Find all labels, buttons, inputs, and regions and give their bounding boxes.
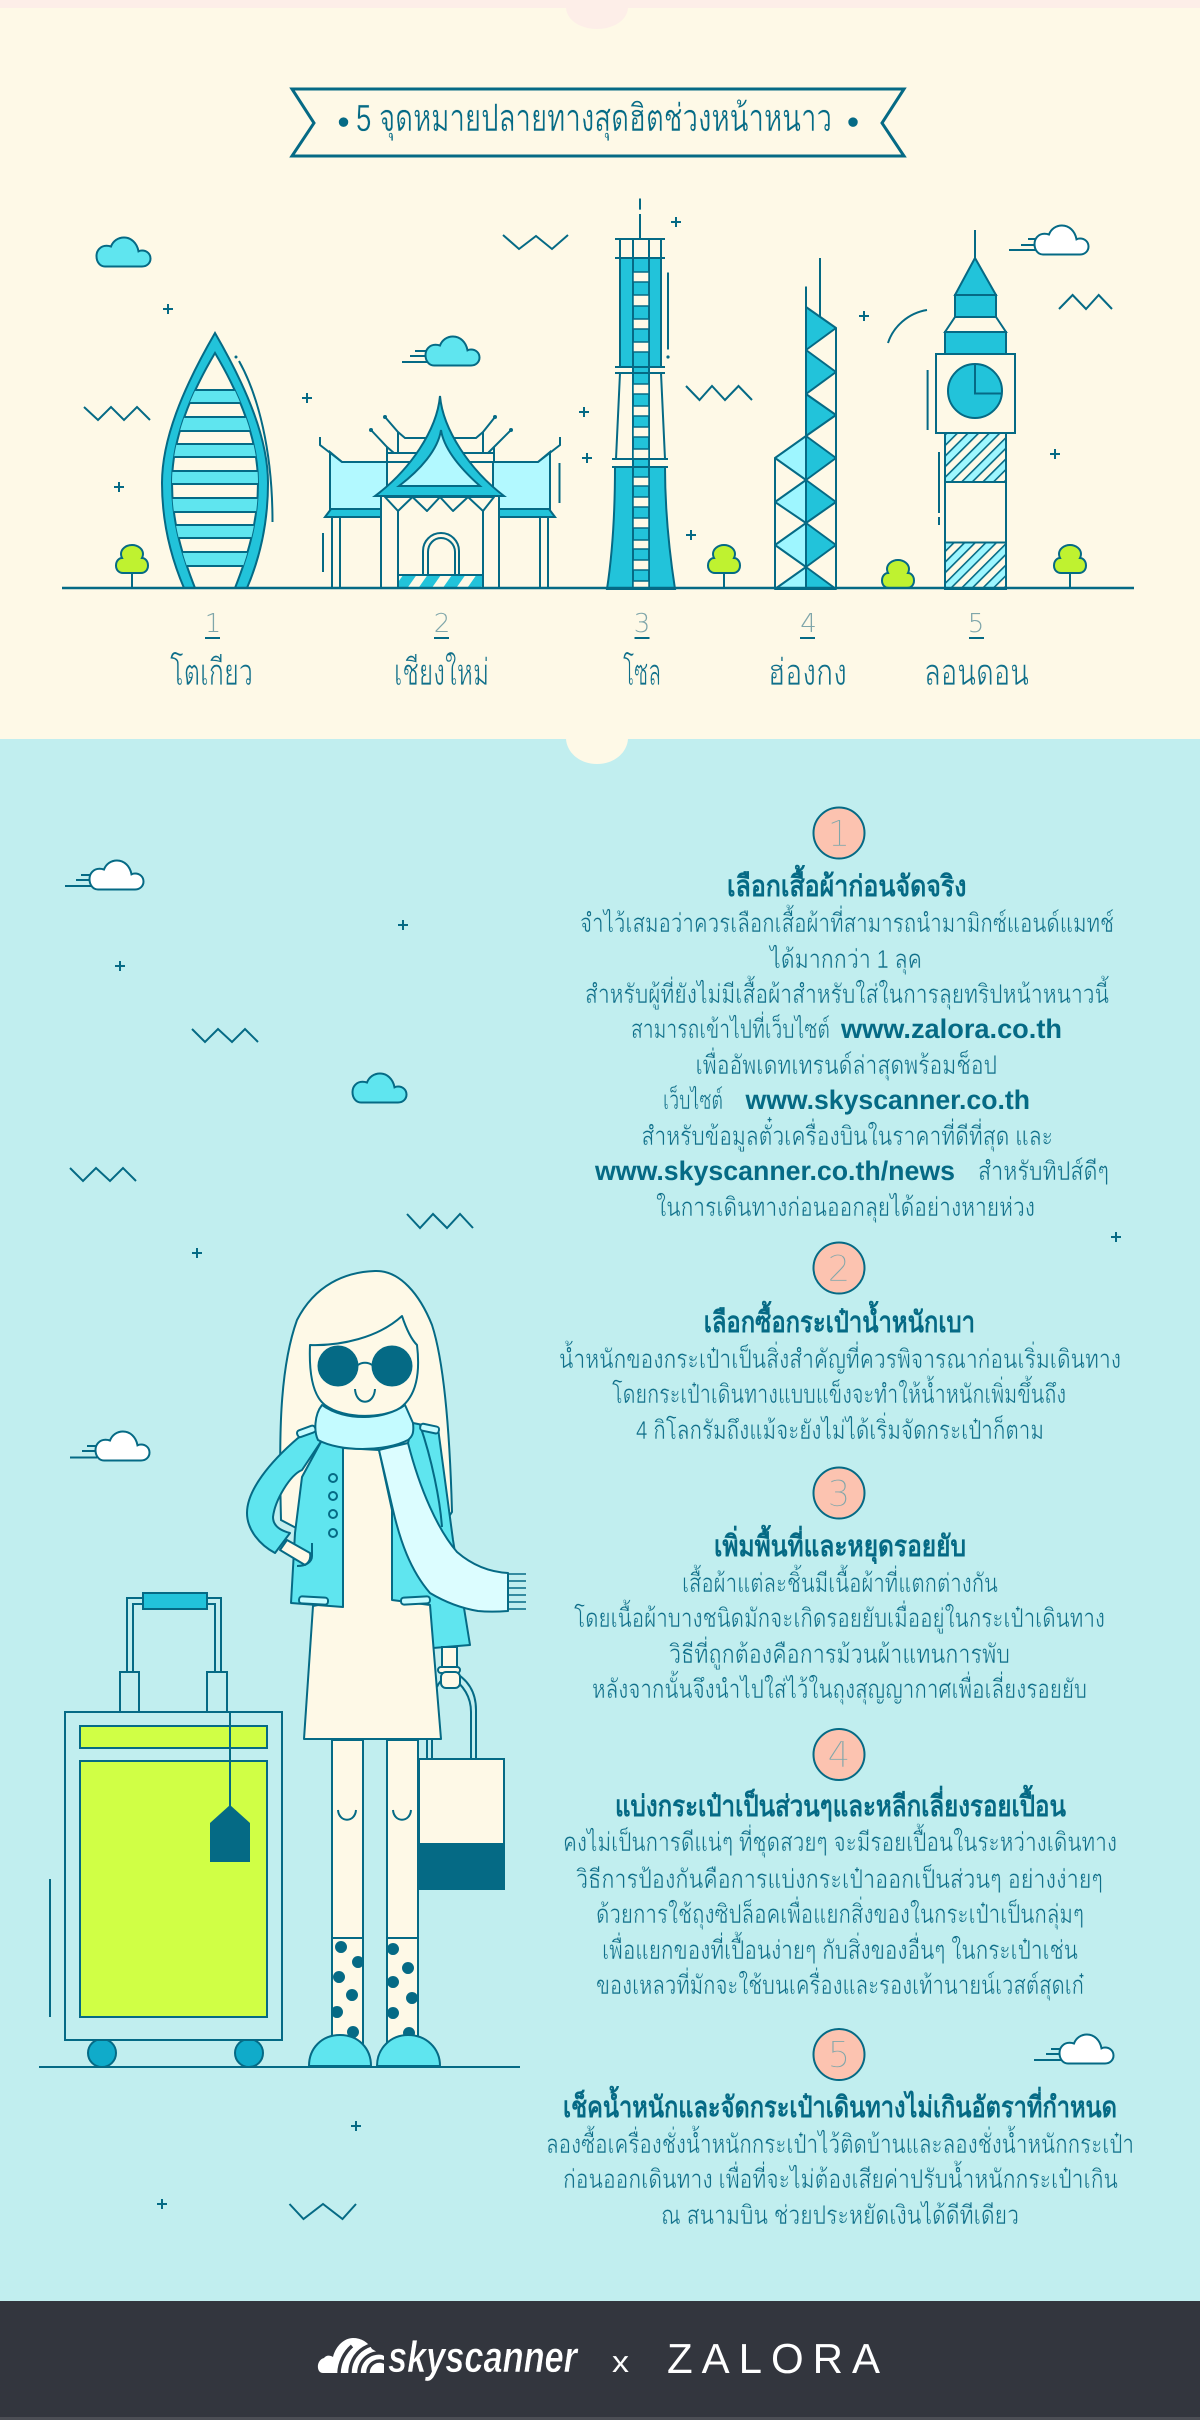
tip 4 number badge <box>814 1729 864 1780</box>
socks <box>332 1938 363 2043</box>
left sleeve <box>247 1430 322 1553</box>
city label 3: 3 <box>634 609 650 639</box>
cloud: cyan middle <box>352 1074 406 1102</box>
tip 4 body text: เพื่อแยกของที่เปื้อนง่ายๆ กับสิ่งของอื่นๆ ในกระเป๋าเช่น <box>602 1931 1078 1965</box>
tip 3 number badge: 3 <box>828 1474 850 1515</box>
legs <box>332 1740 363 1938</box>
tip 1 body text: www.skyscanner.co.th <box>745 1085 1030 1115</box>
tip 4 heading: แบ่งกระเป๋าเป็นส่วนๆและหลีกเลี่ยงรอยเปื้อน <box>615 1784 1066 1823</box>
title ribbon: • <box>847 103 859 140</box>
city label 5 <box>924 609 1029 693</box>
sunglasses <box>318 1346 358 1386</box>
shoes <box>309 2035 371 2066</box>
tip 1 body text <box>580 904 1114 1223</box>
footer bar <box>0 2301 1200 2420</box>
tip 1 body text: ในการเดินทางก่อนออกลุยได้อย่างหายห่วง <box>656 1192 1035 1223</box>
landmark: Chiang Mai temple <box>320 396 560 588</box>
tip 1 body text: ได้มากกว่า 1 ลุค <box>768 944 922 975</box>
tip 5 body text: ณ สนามบิน ช่วยประหยัดเงินได้ดีทีเดียว <box>661 2200 1019 2230</box>
tip 4 body text: วิธีการป้องกันคือการแบ่งกระเป๋าออกเป็นส่วนๆ อย่างง่ายๆ <box>576 1863 1103 1894</box>
tip 5 body text <box>546 2125 1134 2230</box>
tip 4 body text: ด้วยการใช้ถุงซิปล็อคเพื่อแยกสิ่งของในกระเป๋าเป็นกลุ่มๆ <box>596 1896 1084 1930</box>
smile <box>355 1389 375 1402</box>
tip 4 number badge: 4 <box>828 1735 850 1776</box>
city label 2: เชียงใหม่ <box>394 651 489 693</box>
tip 2 <box>559 1242 1121 1445</box>
bag handles <box>427 1671 476 1759</box>
tip 1 body text: สามารถเข้าไปที่เว็บไซต์ <box>631 1011 830 1044</box>
tip 3 body text: หลังจากนั้นจึงนำไปใส่ไว้ในถุงสุญญากาศเพื่อเลี่ยงรอยยับ <box>592 1670 1087 1705</box>
tip 2 body text: 4 กิโลกรัมถึงแม้จะยังไม่ได้เริ่มจัดกระเป๋าก็ตาม <box>636 1412 1044 1445</box>
right hand <box>442 1647 457 1670</box>
cloud: white lower left <box>70 1432 150 1460</box>
trees <box>116 545 1086 588</box>
city label 4 <box>768 609 847 693</box>
tip 1 heading: เลือกเสื้อผ้าก่อนจัดจริง <box>727 864 966 903</box>
footer cross sign: x <box>612 2346 629 2379</box>
right sleeve <box>391 1423 470 1648</box>
city label 1: 1 <box>205 609 221 639</box>
shopping bag <box>419 1759 504 1889</box>
tip 1 body text: เพื่ออัพเดทเทรนด์ล่าสุดพร้อมช็อป <box>696 1047 997 1081</box>
city label 3 <box>623 609 661 693</box>
left jacket panel <box>291 1440 343 1607</box>
city label 3: โซล <box>623 651 661 693</box>
tip 2 number badge <box>814 1242 864 1294</box>
tip 3 heading: เพิ่มพื้นที่และหยุดรอยยับ <box>714 1524 966 1565</box>
landmark: Tokyo tower <box>160 333 272 588</box>
city label 2 <box>394 609 489 693</box>
background: top cream panel <box>0 0 1200 739</box>
lower ground line <box>39 2066 520 2068</box>
cloud: white right <box>1034 2034 1114 2064</box>
scarf tail <box>379 1443 508 1612</box>
cloud: light cyan with speed lines <box>402 336 480 366</box>
city label 4: 4 <box>800 609 817 639</box>
cloud: white upper left <box>65 860 144 890</box>
city label 5: ลอนดอน <box>924 652 1029 693</box>
skyline sky decorations <box>84 217 1112 572</box>
city label 1 <box>170 609 253 693</box>
tip 1 <box>580 808 1114 1223</box>
city label 2: 2 <box>434 609 450 639</box>
hair <box>280 1271 452 1530</box>
epaulettes and pockets <box>296 1425 316 1438</box>
tip 2 body text: โดยกระเป๋าเดินทางแบบแข็งจะทำให้น้ำหนักเพิ่มขึ้นถึง <box>612 1375 1066 1409</box>
cloud: white with speed lines <box>1009 226 1088 254</box>
logo: Zalora wordmark: ZALORA <box>667 2335 880 2382</box>
tip 2 number badge: 2 <box>828 1249 850 1290</box>
tip 3 number badge <box>814 1468 864 1518</box>
tip 1 body text: สำหรับข้อมูลตั๋วเครื่องบินในราคาที่ดีที่สุด และ <box>642 1117 1053 1152</box>
city label 4: ฮ่องกง <box>768 652 847 693</box>
tip 3 body text: เสื้อผ้าแต่ละชิ้นมีเนื้อผ้าที่แตกต่างกัน <box>682 1564 998 1598</box>
tip 3 body text <box>574 1564 1105 1705</box>
skyline ground line <box>62 587 1134 589</box>
lower panel sky decorations <box>50 920 1121 2219</box>
dress <box>304 1448 441 1739</box>
illustration: suitcase <box>65 1593 282 2067</box>
city label 5: 5 <box>968 609 984 639</box>
logo: skyscanner icon <box>318 2338 384 2373</box>
tip 1 number badge: 1 <box>828 814 850 855</box>
scarf ring <box>315 1405 413 1449</box>
tip 3 <box>574 1468 1105 1705</box>
landmark: Hong Kong tower <box>775 258 836 589</box>
logo: skyscanner wordmark: skyscanner <box>388 2333 579 2382</box>
tip 5 <box>546 2029 1134 2230</box>
cloud: light cyan left <box>96 238 150 266</box>
background: teal panel <box>0 739 1200 2301</box>
face <box>310 1316 418 1416</box>
landmark: Seoul tower <box>607 198 675 589</box>
background: top pink strip <box>0 0 1200 29</box>
tip 1 number badge <box>814 808 864 858</box>
tip 1 body text: www.skyscanner.co.th/news <box>594 1156 955 1186</box>
tip 1 body text: สำหรับทิปส์ดีๆ <box>978 1156 1109 1186</box>
tip 1 body text: www.zalora.co.th <box>840 1014 1062 1044</box>
tip 4 body text <box>563 1823 1117 2001</box>
city label 1: โตเกียว <box>170 651 253 693</box>
title ribbon: • <box>338 103 349 140</box>
cream notch at panel join <box>566 739 628 764</box>
tip 2 body text <box>559 1340 1121 1445</box>
tip 1 body text: เว็บไซต์ <box>663 1084 723 1115</box>
tip 5 number badge <box>814 2029 864 2080</box>
landmark: London Big Ben <box>936 230 1015 589</box>
tip 5 number badge: 5 <box>828 2035 850 2076</box>
tip 4 <box>563 1729 1117 2001</box>
left hand <box>280 1540 310 1565</box>
title ribbon: 5 จุดหมายปลายทางสุดฮิตช่วงหน้าหนาว <box>356 98 832 141</box>
title ribbon <box>292 89 904 156</box>
tip 2 heading: เลือกซื้อกระเป๋าน้ำหนักเบา <box>704 1300 975 1339</box>
tip 3 body text: วิธีที่ถูกต้องคือการม้วนผ้าแทนการพับ <box>669 1636 1010 1670</box>
illustration: woman traveller <box>247 1271 526 2066</box>
